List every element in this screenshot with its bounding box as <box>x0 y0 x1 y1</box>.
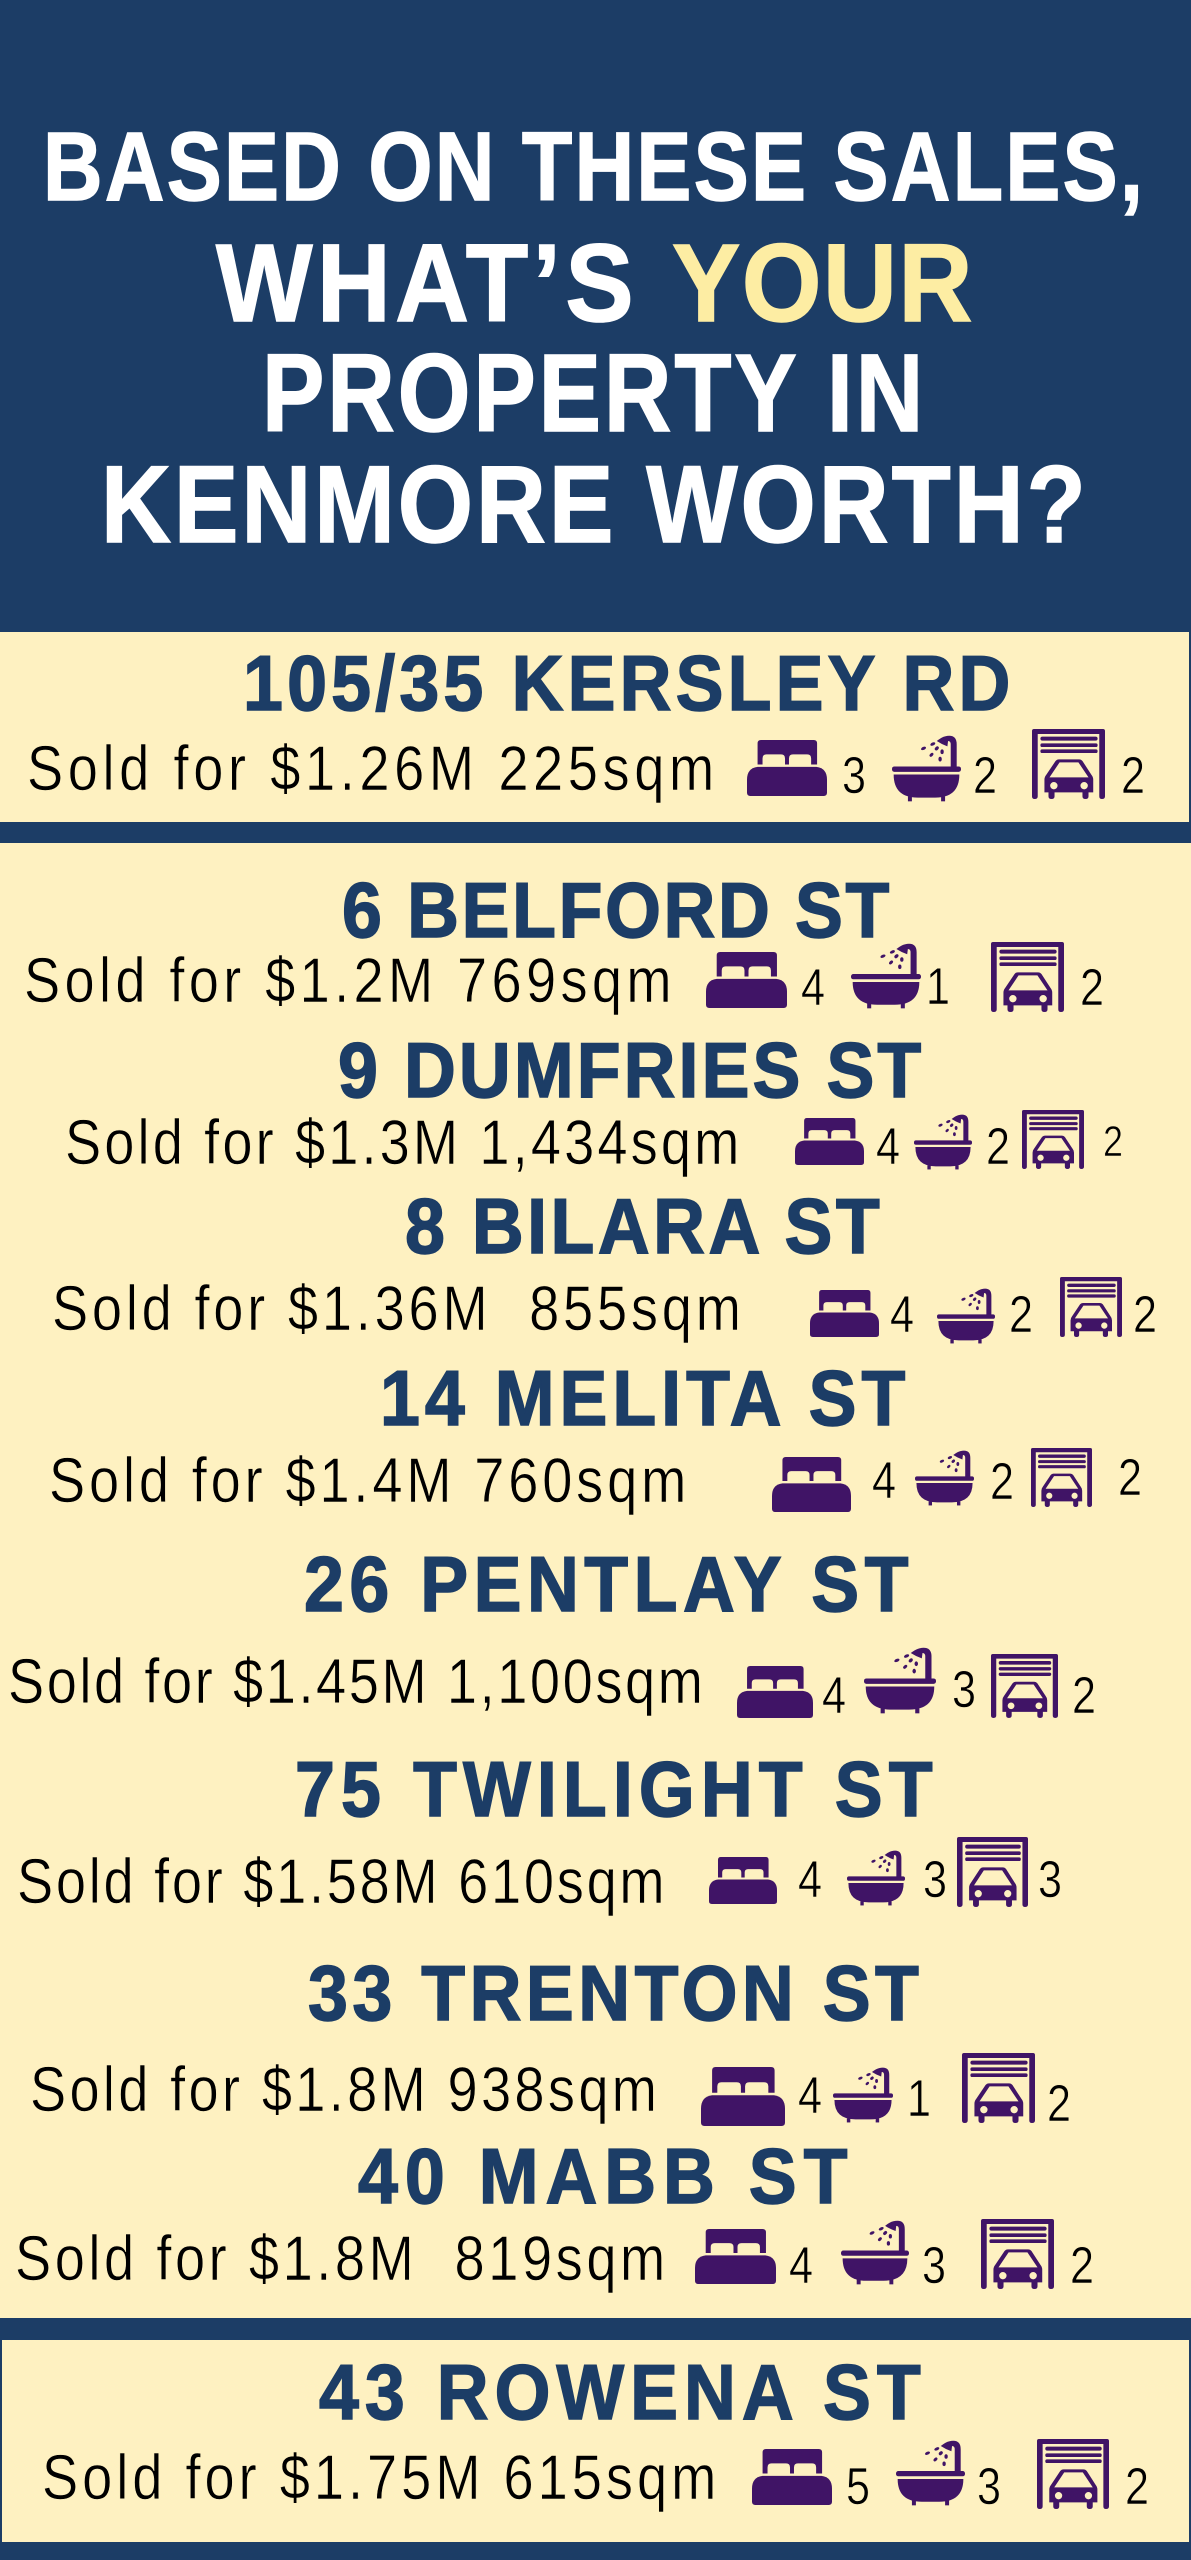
address: 26 PENTLAY ST <box>304 1540 908 1628</box>
icon: garage <box>1022 1110 1084 1169</box>
icon: garage <box>962 2053 1035 2123</box>
sale details: Sold for $1.58M 610sqm <box>17 1847 665 1917</box>
garage count: 2 <box>1133 1286 1157 1344</box>
icon: garage <box>1032 729 1105 799</box>
icon: bath <box>896 2441 965 2505</box>
bedroom count: 4 <box>798 1851 822 1909</box>
icon: bed <box>737 1666 813 1718</box>
sale details: Sold for $1.2M 769sqm <box>24 946 672 1016</box>
header panel <box>0 0 1191 632</box>
icon: garage <box>957 1837 1028 1907</box>
icon: bath <box>892 736 961 801</box>
address: 6 BELFORD ST <box>342 866 889 954</box>
icon: bath <box>937 1289 995 1343</box>
listing: 6 Belford St <box>24 866 1104 1017</box>
bathroom count: 2 <box>973 747 997 805</box>
icon: garage <box>981 2219 1054 2289</box>
bedroom count: 3 <box>842 747 866 805</box>
title: PROPERTY IN <box>262 332 923 455</box>
icon: garage <box>1060 1277 1122 1337</box>
icon: bath <box>851 944 921 1008</box>
icon: bed <box>747 740 827 796</box>
address: 33 TRENTON ST <box>308 1949 919 2037</box>
garage count: 3 <box>1038 1851 1062 1909</box>
garage count: 2 <box>1121 747 1145 805</box>
sale details: Sold for $1.36M 855sqm <box>52 1274 741 1344</box>
garage count: 2 <box>1070 2237 1094 2295</box>
address: 75 TWILIGHT ST <box>295 1745 933 1833</box>
bathroom count: 3 <box>923 1851 947 1909</box>
icon: bath <box>915 1451 974 1505</box>
bedroom count: 4 <box>798 2067 822 2125</box>
sale details: Sold for $1.75M 615sqm <box>42 2443 716 2513</box>
address: 9 DUMFRIES ST <box>338 1026 921 1114</box>
bathroom count: 1 <box>926 958 950 1016</box>
title: WHAT’S <box>216 222 634 345</box>
sale details: Sold for $1.3M 1,434sqm <box>65 1108 739 1178</box>
title: KENMORE WORTH? <box>101 442 1086 565</box>
icon: bed <box>706 952 787 1008</box>
listing: 8 Bilara St <box>52 1182 1157 1344</box>
bedroom count: 4 <box>789 2237 813 2295</box>
address: 8 BILARA ST <box>405 1182 880 1270</box>
icon: bath <box>864 1648 936 1713</box>
listing: 14 Melita St <box>49 1354 1142 1516</box>
sale details: Sold for $1.8M 938sqm <box>30 2055 657 2125</box>
bedroom count: 4 <box>801 959 825 1017</box>
bathroom count: 3 <box>922 2237 946 2295</box>
bathroom count: 2 <box>990 1453 1014 1511</box>
bathroom count: 2 <box>986 1118 1010 1176</box>
listing: 43 Rowena St <box>42 2348 1149 2516</box>
sale details: Sold for $1.26M 225sqm <box>27 734 714 804</box>
garage count: 2 <box>1072 1667 1096 1725</box>
sale details: Sold for $1.8M 819sqm <box>15 2224 665 2294</box>
panel edge: right of Kersley Rd <box>1189 632 1191 822</box>
bedroom count: 4 <box>822 1667 846 1725</box>
bathroom count: 2 <box>1009 1286 1033 1344</box>
divider band: above Rowena St <box>0 2318 1191 2340</box>
bathroom count: 3 <box>952 1661 976 1719</box>
bedroom count: 5 <box>846 2458 870 2516</box>
address: 14 MELITA ST <box>380 1354 905 1442</box>
title <box>43 114 1143 565</box>
address: 40 MABB ST <box>358 2132 847 2220</box>
icon: bed <box>795 1118 864 1165</box>
listing: 26 Pentlay St <box>8 1540 1096 1725</box>
footer band <box>0 2542 1191 2560</box>
icon: bed <box>695 2229 776 2284</box>
garage count: 2 <box>1047 2075 1071 2133</box>
bedroom count: 4 <box>876 1118 900 1176</box>
bathroom count: 3 <box>977 2458 1001 2516</box>
icon: bed <box>709 1857 777 1904</box>
listing: 105/35 Kersley Rd <box>27 639 1145 805</box>
address: 43 ROWENA ST <box>319 2348 921 2436</box>
bathroom count: 1 <box>907 2070 931 2128</box>
icon: bath <box>833 2068 893 2122</box>
listing: 9 Dumfries St <box>65 1026 1123 1178</box>
icon: garage <box>991 1654 1058 1718</box>
icon: garage <box>1037 2439 1109 2509</box>
icon: bed <box>701 2067 785 2126</box>
garage count: 2 <box>1125 2458 1149 2516</box>
sale details: Sold for $1.45M 1,100sqm <box>8 1647 703 1717</box>
icon: bath <box>841 2221 909 2284</box>
icon: bed <box>752 2449 832 2505</box>
garage count: 2 <box>1118 1449 1142 1507</box>
icon: garage <box>991 942 1064 1012</box>
icon: bed <box>772 1457 851 1512</box>
icon: bath <box>847 1851 905 1905</box>
panel edge: left and right of Rowena St <box>0 2340 1191 2542</box>
sale details: Sold for $1.4M 760sqm <box>49 1446 686 1516</box>
address: 105/35 KERSLEY RD <box>243 639 1010 727</box>
title: YOUR <box>672 222 972 345</box>
listing: 75 Twilight St <box>17 1745 1062 1917</box>
bedroom count: 4 <box>872 1452 896 1510</box>
bedroom count: 4 <box>890 1286 914 1344</box>
garage count: 2 <box>1080 959 1104 1017</box>
listing: 33 Trenton St <box>30 1949 1071 2133</box>
garage count: 2 <box>1103 1118 1123 1166</box>
listing: 40 Mabb St <box>15 2132 1094 2295</box>
icon: garage <box>1031 1448 1092 1507</box>
divider band: under Kersley Rd <box>0 822 1191 843</box>
title: BASED ON THESE SALES, <box>43 114 1143 222</box>
icon: bed <box>810 1290 879 1337</box>
icon: bath <box>914 1115 972 1169</box>
